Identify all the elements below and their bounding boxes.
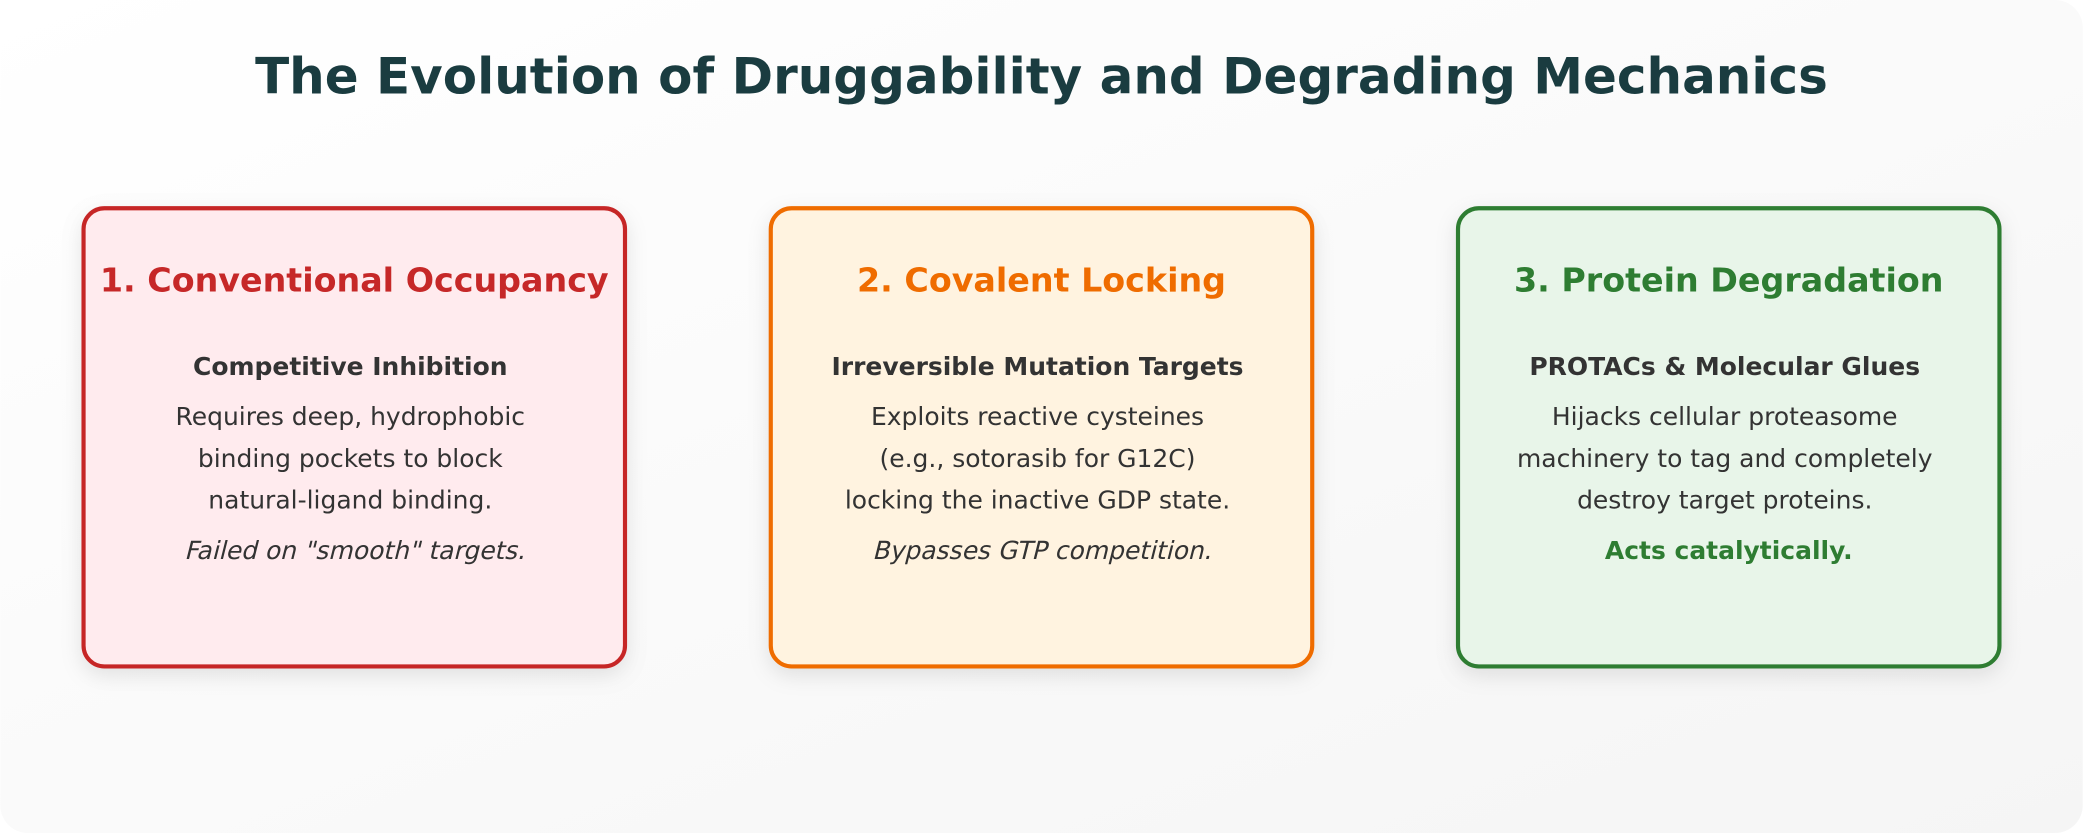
card background: conventional occupancy bbox=[84, 208, 625, 666]
panel: protein degradation bbox=[1458, 208, 1999, 666]
body text: protein degradation: machinery to tag and completely bbox=[1517, 445, 1932, 473]
card background: protein degradation bbox=[1458, 208, 1999, 666]
body text: protein degradation: destroy target proteins. bbox=[1577, 487, 1872, 515]
note: acts catalytically: Acts catalytically. bbox=[1605, 537, 1853, 565]
body text: protein degradation: Hijacks cellular proteasome bbox=[1552, 403, 1898, 431]
body text: competitive inhibition bbox=[176, 403, 525, 515]
note: smooth targets: Failed on "smooth" targets. bbox=[182, 537, 530, 565]
body text: competitive inhibition: natural-ligand binding. bbox=[208, 487, 492, 515]
subheading: competitive inhibition: Competitive Inhibition bbox=[193, 353, 508, 381]
panel: conventional occupancy bbox=[84, 208, 625, 666]
body text: competitive inhibition: binding pockets to block bbox=[198, 445, 503, 473]
heading: covalent locking: 2. Covalent Locking bbox=[857, 259, 1226, 299]
body text: covalent locking: Exploits reactive cysteines bbox=[871, 403, 1204, 431]
title: The Evolution of Druggability and Degrading Mechanics bbox=[255, 47, 1828, 106]
body text: covalent locking: locking the inactive GDP state. bbox=[845, 487, 1230, 515]
heading: protein degradation: 3. Protein Degradation bbox=[1514, 259, 1943, 299]
body text: covalent locking: (e.g., sotorasib for G12C) bbox=[880, 445, 1195, 473]
panel: covalent locking bbox=[771, 208, 1312, 666]
subheading: irreversible mutation targets: Irreversible Mutation Targets bbox=[831, 353, 1244, 381]
body text: protein degradation bbox=[1517, 403, 1932, 515]
heading: conventional occupancy: 1. Conventional Occupancy bbox=[100, 259, 609, 299]
body text: competitive inhibition: Requires deep, hydrophobic bbox=[176, 403, 525, 431]
body text: covalent locking bbox=[845, 403, 1230, 515]
subheading: PROTACs and molecular glues: PROTACs & Molecular Glues bbox=[1529, 353, 1920, 381]
card background: covalent locking bbox=[771, 208, 1312, 666]
note: GTP competition: Bypasses GTP competition. bbox=[870, 537, 1216, 565]
